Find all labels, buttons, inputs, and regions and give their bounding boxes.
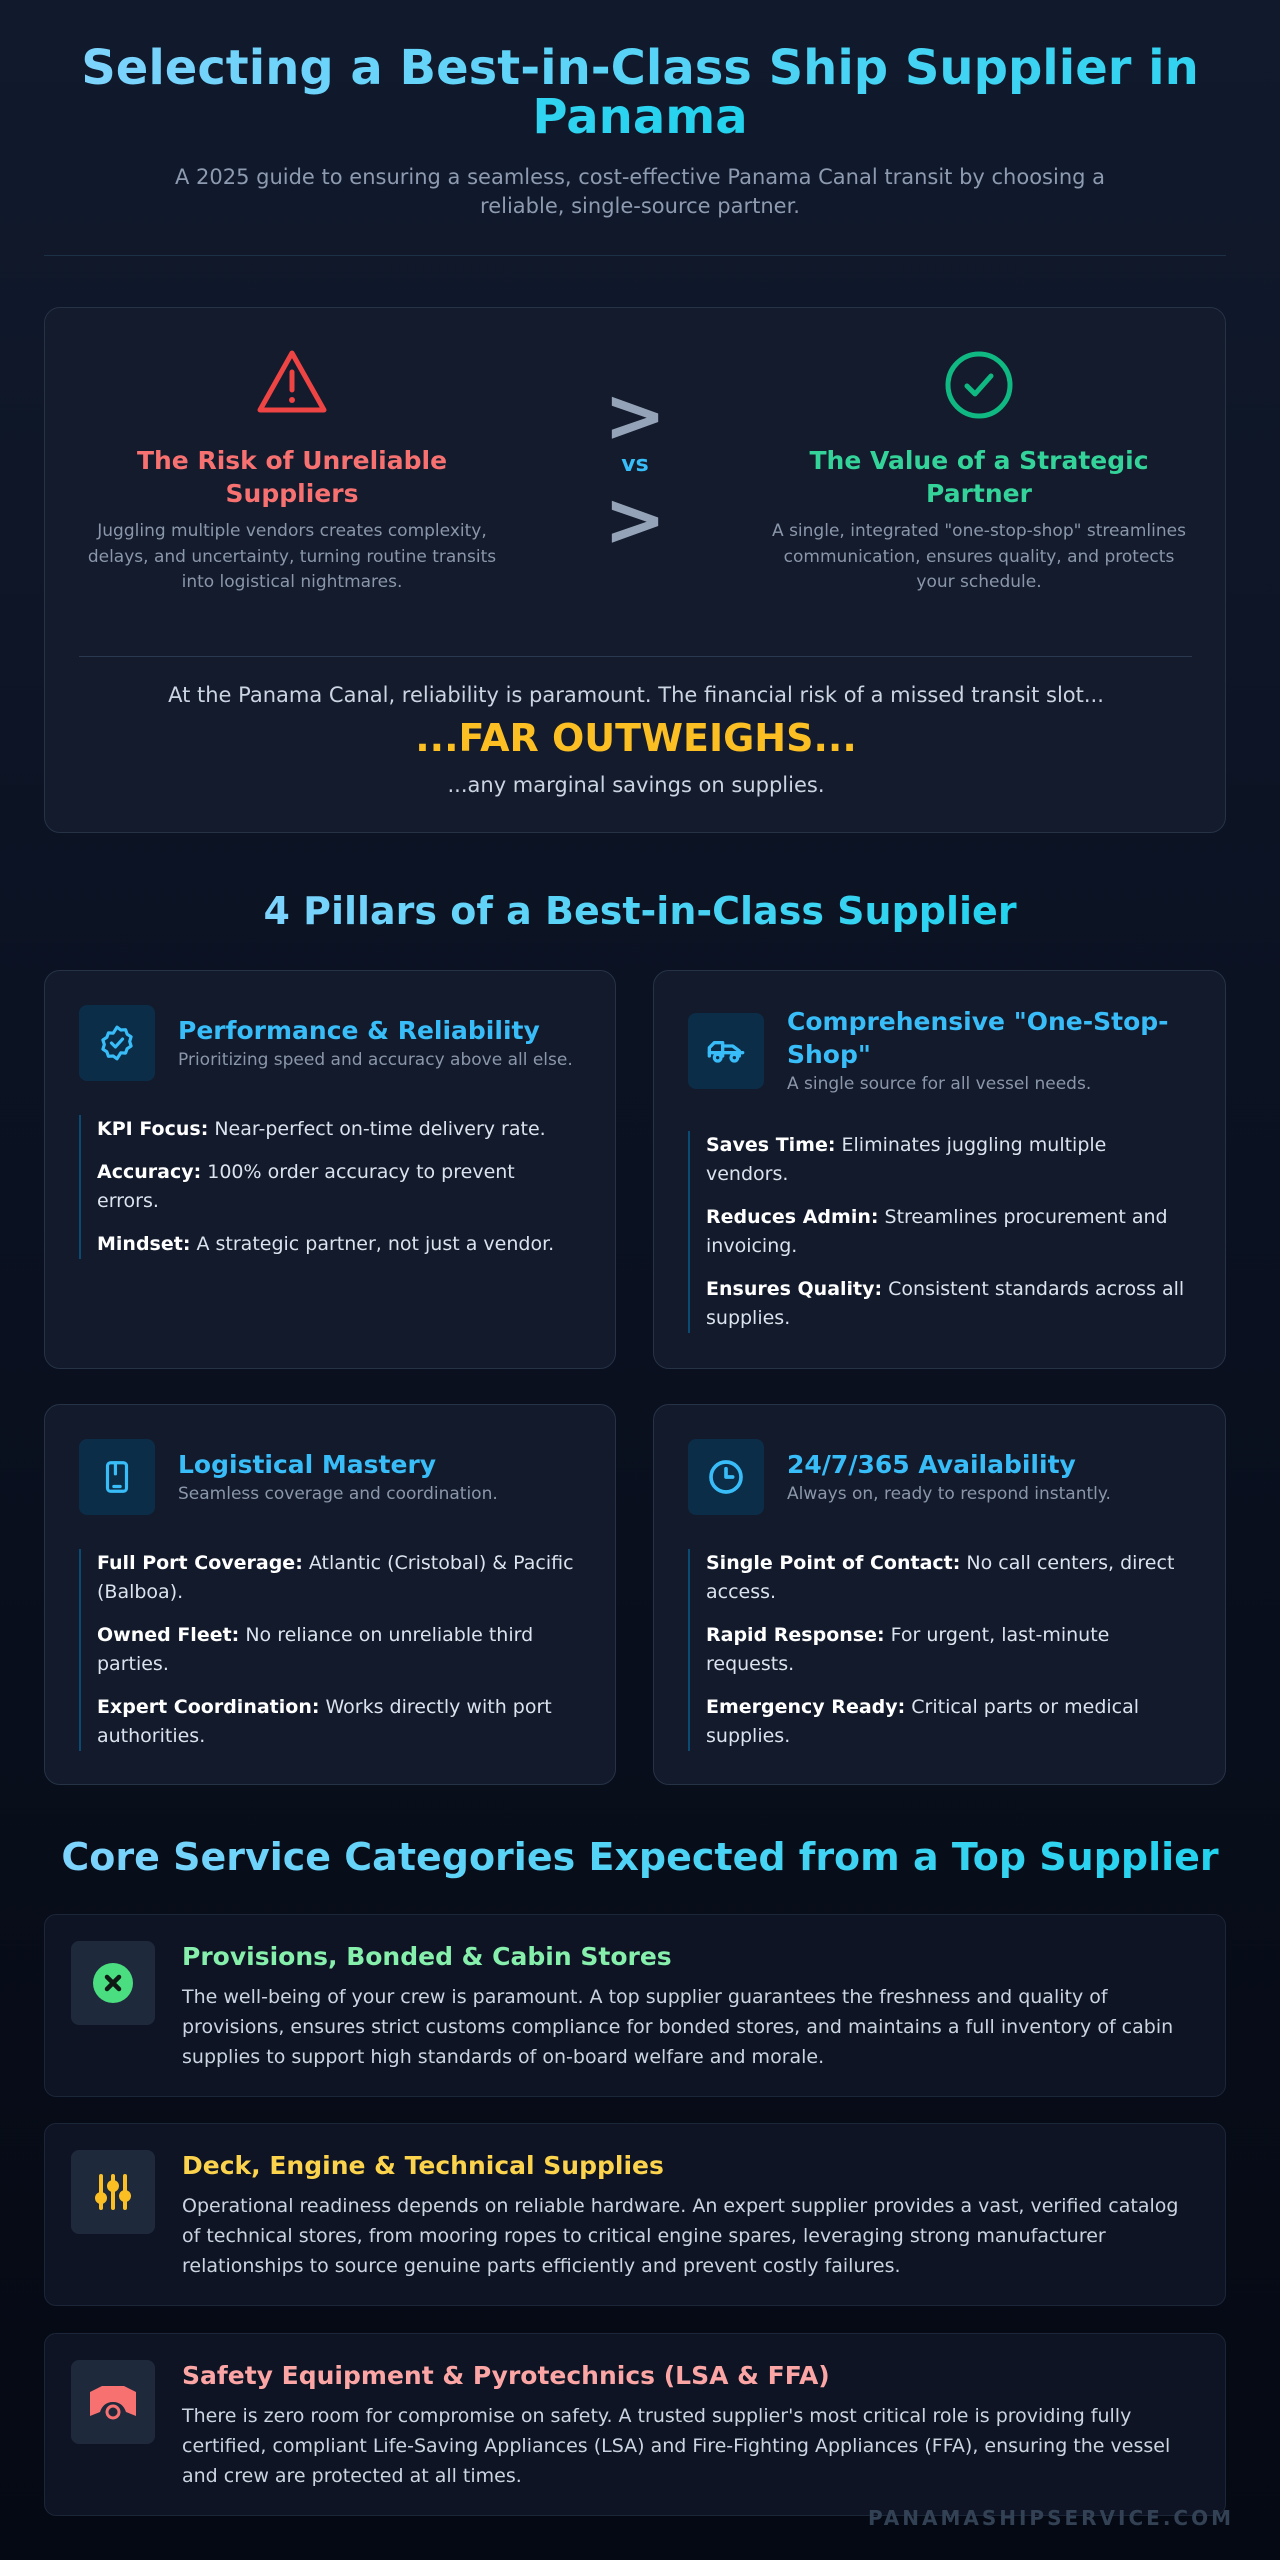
callout: far outweighs: ...any marginal savings on supplies. xyxy=(447,773,825,797)
vs divider: > xyxy=(604,477,666,563)
service: deck engine xyxy=(44,2123,1226,2306)
service: provisions xyxy=(44,1914,1226,2097)
vs divider: > xyxy=(604,373,666,459)
icon: truck xyxy=(688,1013,764,1089)
icon: badge check xyxy=(79,1005,155,1081)
card: performance: Accuracy: 100% order accuracy to prevent errors. xyxy=(97,1161,515,1212)
icon: warning xyxy=(258,350,326,412)
card: performance: Prioritizing speed and accuracy above all else. xyxy=(178,1050,573,1070)
icon: provisions xyxy=(71,1941,155,2025)
card: availability: 24/7/365 Availability xyxy=(787,1450,1076,1478)
watermark: PANAMASHIPSERVICE.COM xyxy=(868,2506,1234,2530)
panel: risk vs value xyxy=(44,307,1226,833)
card: performance xyxy=(44,970,616,1369)
service: safety: There is zero room for compromise on safety. A trusted supplier's most critical role is providing fully certified, compliant Life-Saving Appliances (LSA) and Fire-Fighting Appliances (FFA), ensuring the vessel and crew are protected at all times. xyxy=(182,2405,1170,2487)
service: safety: Safety Equipment & Pyrotechnics (LSA & FFA) xyxy=(182,2361,830,2390)
icon: device xyxy=(79,1439,155,1515)
icon: clock xyxy=(688,1439,764,1515)
card: logistical mastery: Seamless coverage and coordination. xyxy=(178,1484,498,1504)
card: logistical mastery: Expert Coordination: Works directly with port authorities. xyxy=(97,1696,552,1747)
title: Selecting a Best-in-Class Ship Supplier in Panama xyxy=(81,40,1199,145)
card: one-stop-shop: Ensures Quality: Consistent standards across all supplies. xyxy=(706,1278,1184,1329)
heading: core services: Core Service Categories Expected from a Top Supplier xyxy=(61,1835,1219,1879)
icon: safety xyxy=(71,2360,155,2444)
card: logistical mastery: Owned Fleet: No reliance on unreliable third parties. xyxy=(97,1624,533,1675)
card: availability: Emergency Ready: Critical parts or medical supplies. xyxy=(706,1696,1139,1747)
card: one-stop-shop: Comprehensive "One-Stop-Shop" xyxy=(787,1007,1169,1069)
service: safety xyxy=(44,2333,1226,2516)
card: logistical mastery: Logistical Mastery xyxy=(178,1450,436,1478)
card: availability: Always on, ready to respond instantly. xyxy=(787,1484,1111,1504)
vs divider: vs xyxy=(621,452,649,477)
risk heading: The Risk of Unreliable Suppliers xyxy=(137,446,447,508)
service: provisions: The well-being of your crew is paramount. A top supplier guarantees the freshness and quality of provisions, ensures strict customs compliance for bonded stores, and maintains a full inventory of cabin supplies to support high standards of on-board welfare and morale. xyxy=(182,1986,1173,2068)
value heading: The Value of a Strategic Partner xyxy=(809,446,1149,508)
service: deck engine: Deck, Engine & Technical Supplies xyxy=(182,2151,664,2180)
card: one-stop-shop: Reduces Admin: Streamlines procurement and invoicing. xyxy=(706,1206,1168,1257)
risk text: Juggling multiple vendors creates complexity, delays, and uncertainty, turning routine transits into logistical nightmares. xyxy=(88,521,496,592)
card: one-stop-shop: A single source for all vessel needs. xyxy=(787,1074,1091,1094)
callout: far outweighs: At the Panama Canal, reliability is paramount. The financial risk of a missed transit slot... xyxy=(168,683,1104,707)
card: availability xyxy=(653,1404,1226,1785)
card: availability: Rapid Response: For urgent, last-minute requests. xyxy=(706,1624,1109,1675)
card: performance: Performance & Reliability xyxy=(178,1016,540,1044)
callout: far outweighs: ...FAR OUTWEIGHS... xyxy=(415,716,857,760)
card: availability: Single Point of Contact: No call centers, direct access. xyxy=(706,1552,1174,1603)
heading: pillars: 4 Pillars of a Best-in-Class Supplier xyxy=(263,889,1017,933)
vs divider xyxy=(604,373,666,563)
subtitle: A 2025 guide to ensuring a seamless, cost-effective Panama Canal transit by choosing a reliable, single-source partner. xyxy=(175,165,1105,218)
card: one-stop-shop xyxy=(653,970,1226,1369)
icon: sliders xyxy=(71,2150,155,2234)
card: logistical mastery: Full Port Coverage: Atlantic (Cristobal) & Pacific (Balboa). xyxy=(97,1552,574,1603)
card: performance: KPI Focus: Near-perfect on-time delivery rate. xyxy=(97,1118,546,1140)
service: deck engine: Operational readiness depends on reliable hardware. An expert supplier provides a vast, verified catalog of technical stores, from mooring ropes to critical engine spares, leveraging strong manufacturer relationships to source genuine parts efficiently and prevent costly failures. xyxy=(182,2195,1178,2277)
card: logistical mastery xyxy=(44,1404,616,1785)
icon: check circle xyxy=(946,352,1012,418)
card: performance: Mindset: A strategic partner, not just a vendor. xyxy=(97,1233,554,1255)
callout: far outweighs xyxy=(168,683,1104,797)
value text: A single, integrated "one-stop-shop" streamlines communication, ensures quality, and protects your schedule. xyxy=(772,521,1186,592)
card: one-stop-shop: Saves Time: Eliminates juggling multiple vendors. xyxy=(706,1134,1106,1185)
service: provisions: Provisions, Bonded & Cabin Stores xyxy=(182,1942,672,1971)
